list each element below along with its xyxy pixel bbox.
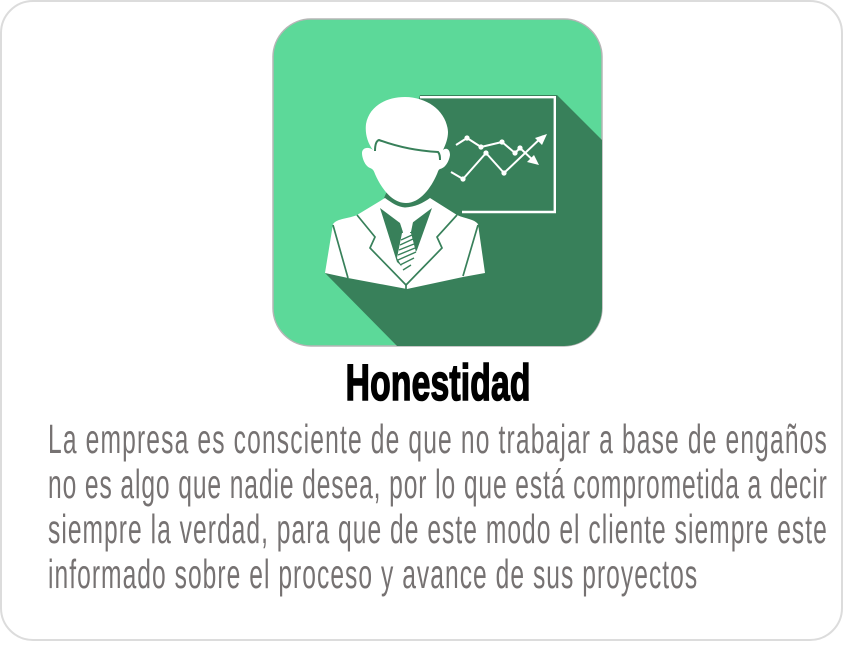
icon: teacher presenting a chart: [273, 19, 604, 348]
text block: description: [48, 417, 827, 598]
suit body: [325, 198, 485, 289]
long shadow: [325, 95, 604, 348]
jacket lines: [333, 215, 478, 290]
text block: description: siempre la verdad, para que de este modo el cliente siempre este: [48, 507, 827, 553]
person silhouette: [325, 97, 485, 290]
heading: Honestidad: [346, 355, 530, 412]
hair line: [375, 140, 440, 160]
tie: [397, 208, 417, 275]
icon background tile: [273, 19, 602, 346]
presentation board: [420, 97, 555, 212]
text block: description: no es algo que nadie desea, por lo que está comprometida a decir: [48, 462, 827, 508]
text block: description: La empresa es consciente de que no trabajar a base de engaños: [48, 417, 827, 463]
shirt opening: [380, 208, 432, 270]
head: [362, 97, 450, 203]
chart lines with arrows: [451, 134, 547, 182]
text block: description: informado sobre el proceso y avance de sus proyectos: [48, 552, 697, 598]
